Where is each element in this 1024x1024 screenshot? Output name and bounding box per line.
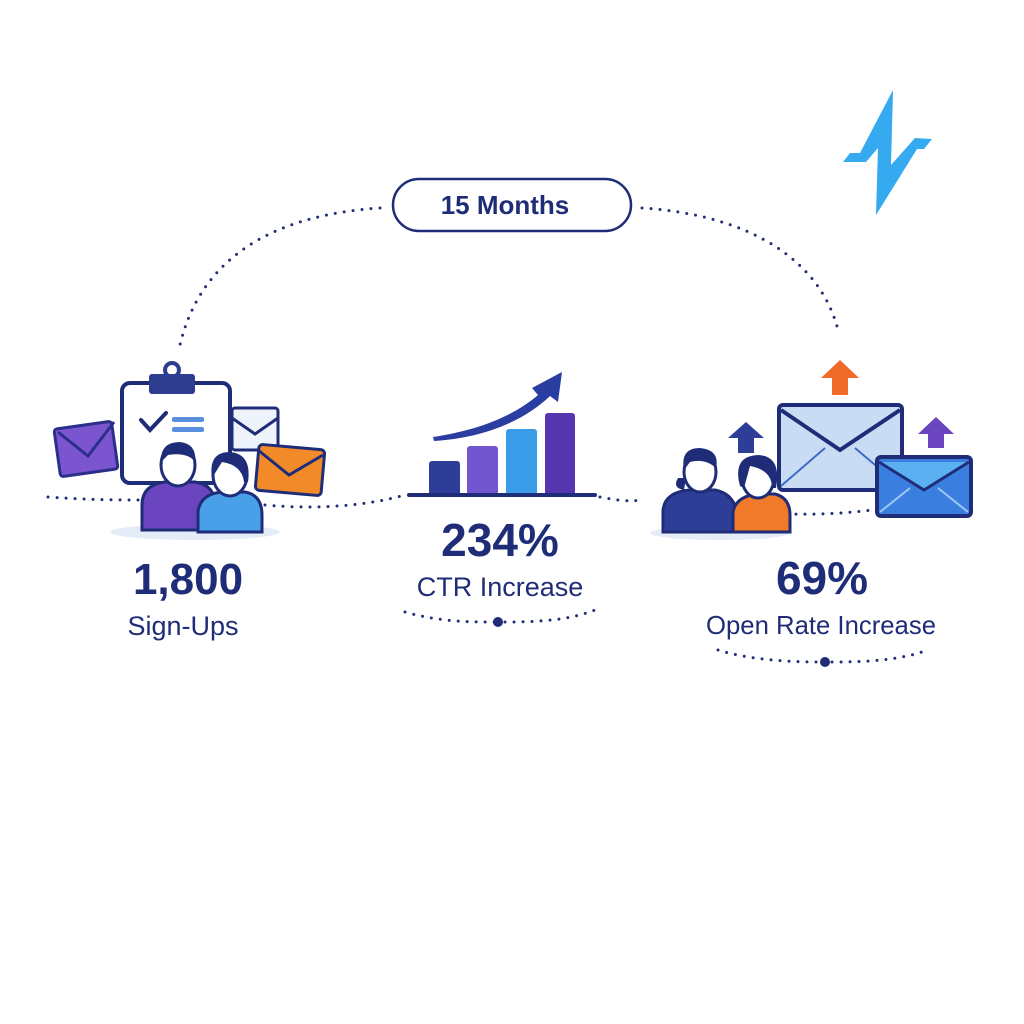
- folder envelope: [232, 408, 278, 450]
- small envelope: [877, 457, 971, 516]
- pill: 15 Months: [393, 179, 631, 231]
- person woman: [198, 452, 262, 532]
- dotted arcs: [48, 208, 928, 662]
- person man: [142, 442, 215, 530]
- stat: sign-ups: [127, 555, 243, 641]
- stat: CTR: 234%: [441, 514, 559, 566]
- stat: CTR: [417, 514, 583, 602]
- envelope purple: [54, 421, 118, 477]
- bar chart: [407, 372, 597, 497]
- icon group: sign-ups: [54, 363, 325, 540]
- clipboard: [122, 363, 230, 483]
- stat: CTR: CTR Increase: [417, 572, 583, 602]
- envelope orange: [255, 444, 325, 496]
- stat: open rate: 69%: [776, 552, 868, 604]
- big envelope: [779, 405, 902, 490]
- arrow: [433, 372, 562, 441]
- stat: open rate: Open Rate Increase: [706, 610, 936, 640]
- person left: [663, 448, 737, 532]
- icon: lightning bolt: [843, 90, 932, 215]
- person right: [733, 455, 790, 532]
- pill: 15 Months: 15 Months: [441, 190, 569, 220]
- stat: sign-ups: Sign-Ups: [127, 611, 239, 641]
- icon group: open rate: [650, 360, 971, 540]
- arrows: [821, 360, 859, 395]
- stat: sign-ups: 1,800: [133, 555, 243, 604]
- stat: open rate: [706, 552, 936, 640]
